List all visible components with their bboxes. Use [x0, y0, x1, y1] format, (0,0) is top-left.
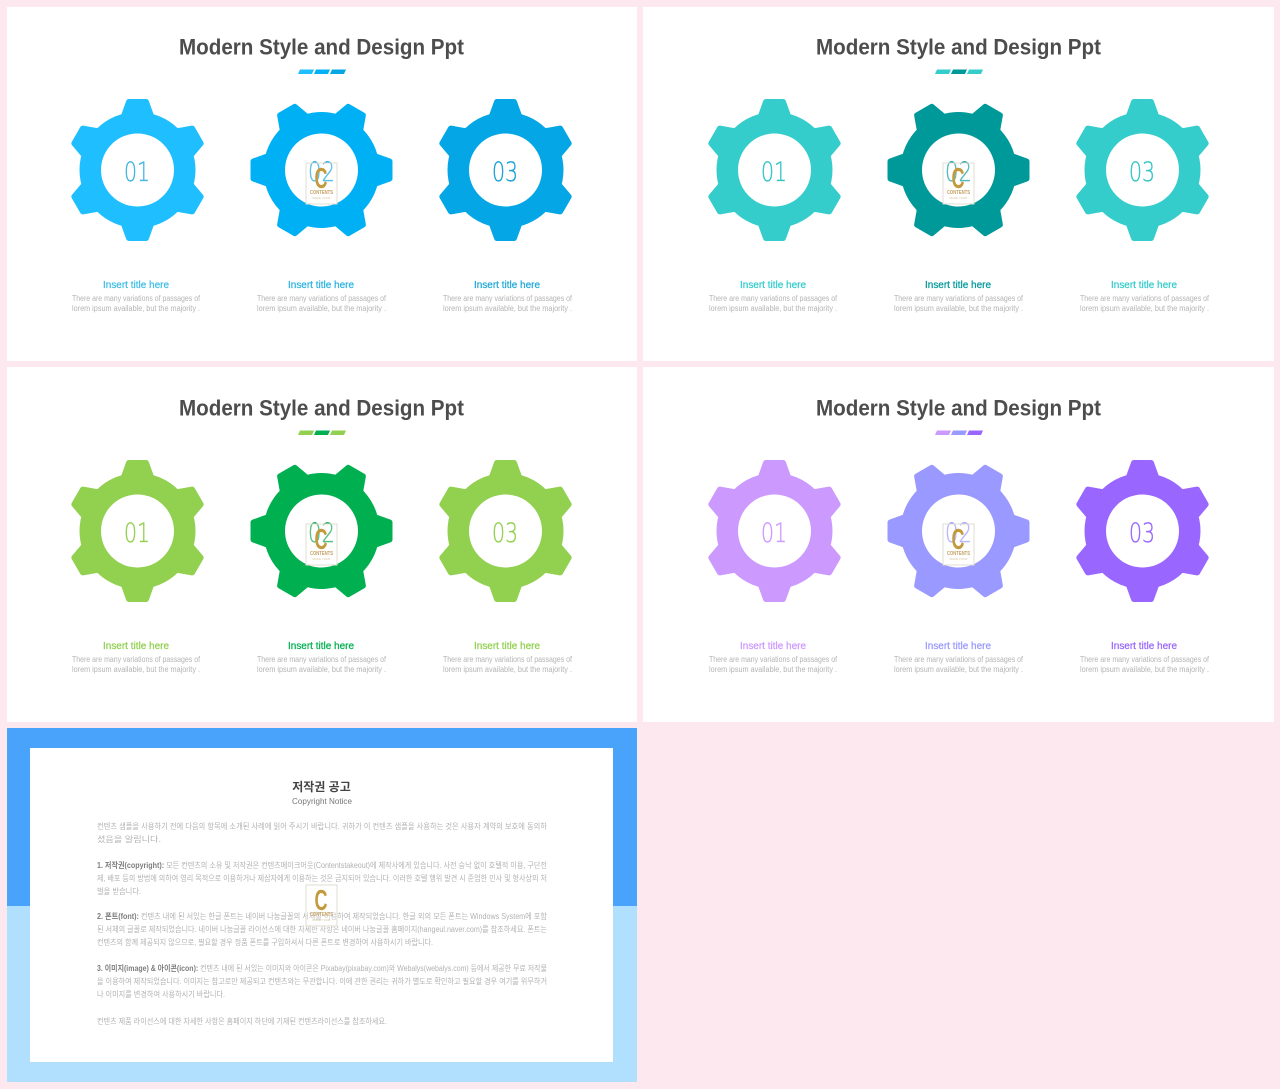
gear 03: 03 — [492, 518, 518, 549]
gear 03 — [439, 463, 572, 599]
gear 01: 01 — [761, 157, 787, 188]
title dashes — [298, 70, 346, 74]
caption 2 — [894, 641, 1024, 674]
notice intro: 셨음을 알립니다. — [97, 834, 161, 844]
notice section 3: 나 이미지를 변경하여 사용하시기 바랍니다. — [97, 989, 225, 999]
notice section 2: 컨텐츠의 함께 제공되지 않으므로, 필요할 경우 정품 폰트를 구입하셔서 다른 폰트로 변경하여 사용하시기 바랍니다. — [97, 937, 433, 947]
gear 02 — [230, 78, 413, 262]
caption 1: Insert title here — [103, 280, 169, 291]
caption 3: There are many variations of passages of — [443, 655, 573, 664]
gear 03: 03 — [1129, 157, 1155, 188]
gear 02: 02 — [945, 518, 972, 549]
gear 02: 02 — [308, 518, 335, 549]
caption 2: lorem ipsum available, but the majority . — [257, 665, 386, 674]
notice intro — [97, 821, 548, 844]
notice section 1: 1. 저작권(copyright): 모든 컨텐츠의 소유 및 저작권은 컨텐츠메이크어웃(Contentstakeout)에 제작사에게 있습니다. 사전 승낙 없이 호텔적 이용, 구단전 — [97, 860, 547, 870]
notice section 1: 벌을 받습니다. — [97, 886, 141, 896]
gear 01 — [708, 102, 841, 238]
caption 3: Insert title here — [474, 641, 540, 652]
caption 1 — [709, 641, 838, 674]
caption 1: There are many variations of passages of — [709, 294, 838, 303]
watermark — [306, 163, 337, 204]
watermark — [306, 524, 337, 565]
caption 3 — [1080, 641, 1210, 674]
caption 3 — [443, 641, 573, 674]
title dashes — [935, 430, 983, 435]
caption 3: lorem ipsum available, but the majority . — [443, 304, 572, 313]
caption 2: There are many variations of passages of — [257, 655, 387, 664]
caption 2: There are many variations of passages of — [894, 655, 1024, 664]
gear 02: 02 — [945, 157, 972, 188]
caption 3: Insert title here — [474, 280, 540, 291]
title dashes — [298, 430, 346, 435]
caption 3: There are many variations of passages of — [443, 294, 573, 303]
heading: Modern Style and Design Ppt — [179, 396, 465, 420]
notice heading: 저작권 공고 — [292, 779, 351, 794]
panel: purple gears — [643, 367, 1274, 722]
notice section 3: 3. 이미지(image) & 아이콘(icon): 컨텐츠 내에 된 서있는 이미지와 아이콘은 Pixabay(pixabay.com)와 Webalys(webalys.com) 등에서 제공한 무료 저작물 — [97, 963, 547, 973]
notice closing: 컨텐츠 제품 라이선스에 대한 자세한 사항은 홈페이지 하단에 기재된 컨텐츠라이선스를 참조하세요. — [97, 1016, 387, 1026]
gear 02 — [867, 439, 1050, 623]
caption 3: Insert title here — [1111, 280, 1177, 291]
caption 1 — [72, 641, 201, 674]
gear 01 — [708, 463, 841, 599]
gear 02 — [230, 439, 413, 623]
gear 01 — [71, 463, 204, 599]
caption 2 — [894, 280, 1024, 313]
caption 2: lorem ipsum available, but the majority . — [894, 304, 1023, 313]
gear 01: 01 — [761, 518, 787, 549]
gear 03 — [1076, 102, 1209, 238]
caption 3: Insert title here — [1111, 641, 1177, 652]
heading: Modern Style and Design Ppt — [816, 34, 1102, 60]
notice intro: 컨텐츠 샘플을 사용하기 전에 다음의 항목에 소개된 사례에 읽어 주시기 바랍니다. 귀하가 이 컨텐츠 샘플을 사용하는 것은 사용자 계약의 보호에 동의하 — [97, 821, 548, 831]
caption 2: Insert title here — [288, 280, 354, 291]
gear 03 — [1076, 463, 1209, 599]
notice section 2: 된 서체의 글꼴로 제작되었습니다. 네이버 나눔글꼴 라이선스에 대한 자세한 사항은 네이버 나눔글꼴 홈페이지(hangeul.naver.com)를 참조하세요. 폰트는 — [97, 924, 547, 934]
caption 1 — [709, 280, 838, 313]
caption 3: lorem ipsum available, but the majority . — [1080, 304, 1209, 313]
caption 3: lorem ipsum available, but the majority . — [443, 665, 572, 674]
caption 2 — [257, 641, 387, 674]
title dashes — [935, 70, 983, 74]
caption 1: There are many variations of passages of — [709, 655, 838, 664]
caption 1: lorem ipsum available, but the majority . — [72, 304, 200, 313]
caption 2: Insert title here — [925, 280, 991, 291]
heading: Modern Style and Design Ppt — [179, 34, 465, 60]
caption 2: lorem ipsum available, but the majority . — [257, 304, 386, 313]
caption 2: There are many variations of passages of — [257, 294, 387, 303]
caption 3: There are many variations of passages of — [1080, 655, 1210, 664]
caption 1: Insert title here — [103, 641, 169, 652]
gear 03 — [439, 102, 572, 238]
heading: Modern Style and Design Ppt — [816, 396, 1102, 420]
caption 2: Insert title here — [288, 641, 354, 652]
caption 1: There are many variations of passages of — [72, 294, 201, 303]
caption 1: lorem ipsum available, but the majority . — [72, 665, 200, 674]
watermark — [943, 163, 974, 204]
caption 2: Insert title here — [925, 641, 991, 652]
caption 1: lorem ipsum available, but the majority . — [709, 665, 837, 674]
gear 01: 01 — [124, 157, 150, 188]
notice heading: Copyright Notice — [292, 796, 352, 806]
gear 01: 01 — [124, 518, 150, 549]
caption 1 — [72, 280, 201, 313]
notice heading — [292, 779, 352, 806]
notice section 1: 제, 배포 등의 방법에 의하여 영리 목적으로 이용하거나 제삼자에게 이용하는 것은 금지되어 있습니다. 이러한 호텔 행위 발견 시 준엄한 민사 및 형사상의 처 — [97, 873, 547, 883]
caption 2: There are many variations of passages of — [894, 294, 1024, 303]
caption 1: Insert title here — [740, 641, 806, 652]
caption 2: lorem ipsum available, but the majority . — [894, 665, 1023, 674]
caption 1: lorem ipsum available, but the majority . — [709, 304, 837, 313]
caption 3 — [1080, 280, 1210, 313]
panel: blue gears — [7, 7, 637, 361]
gear 02: 02 — [308, 157, 335, 188]
panel: copyright notice — [7, 728, 637, 1082]
panel: green gears — [7, 367, 637, 722]
watermark — [943, 524, 974, 565]
gear 01 — [71, 102, 204, 238]
notice section 2: 2. 폰트(font): 컨텐츠 내에 된 서있는 한글 폰트는 네이버 나눔글꼴의 서체를 이용하여 제작되었습니다. 한글 외의 모든 폰트는 Windows System에 포함 — [97, 911, 548, 921]
caption 3 — [443, 280, 573, 313]
notice section 3 — [97, 963, 547, 999]
watermark — [306, 885, 337, 926]
caption 2 — [257, 280, 387, 313]
gear 03: 03 — [1129, 518, 1155, 549]
panel: teal gears — [643, 7, 1274, 361]
caption 1: There are many variations of passages of — [72, 655, 201, 664]
notice section 3: 을 이용하여 제작되었습니다. 이미지는 참고로만 제공되고 컨텐츠와는 무관합니다. 이에 관한 권리는 귀하가 별도로 확인하고 필요할 경우 여기를 위무하거 — [97, 976, 547, 986]
caption 3: lorem ipsum available, but the majority . — [1080, 665, 1209, 674]
gear 03: 03 — [492, 157, 518, 188]
caption 1: Insert title here — [740, 280, 806, 291]
notice section 1 — [97, 860, 547, 896]
notice section 2 — [97, 911, 548, 947]
caption 3: There are many variations of passages of — [1080, 294, 1210, 303]
gear 02 — [867, 78, 1050, 262]
